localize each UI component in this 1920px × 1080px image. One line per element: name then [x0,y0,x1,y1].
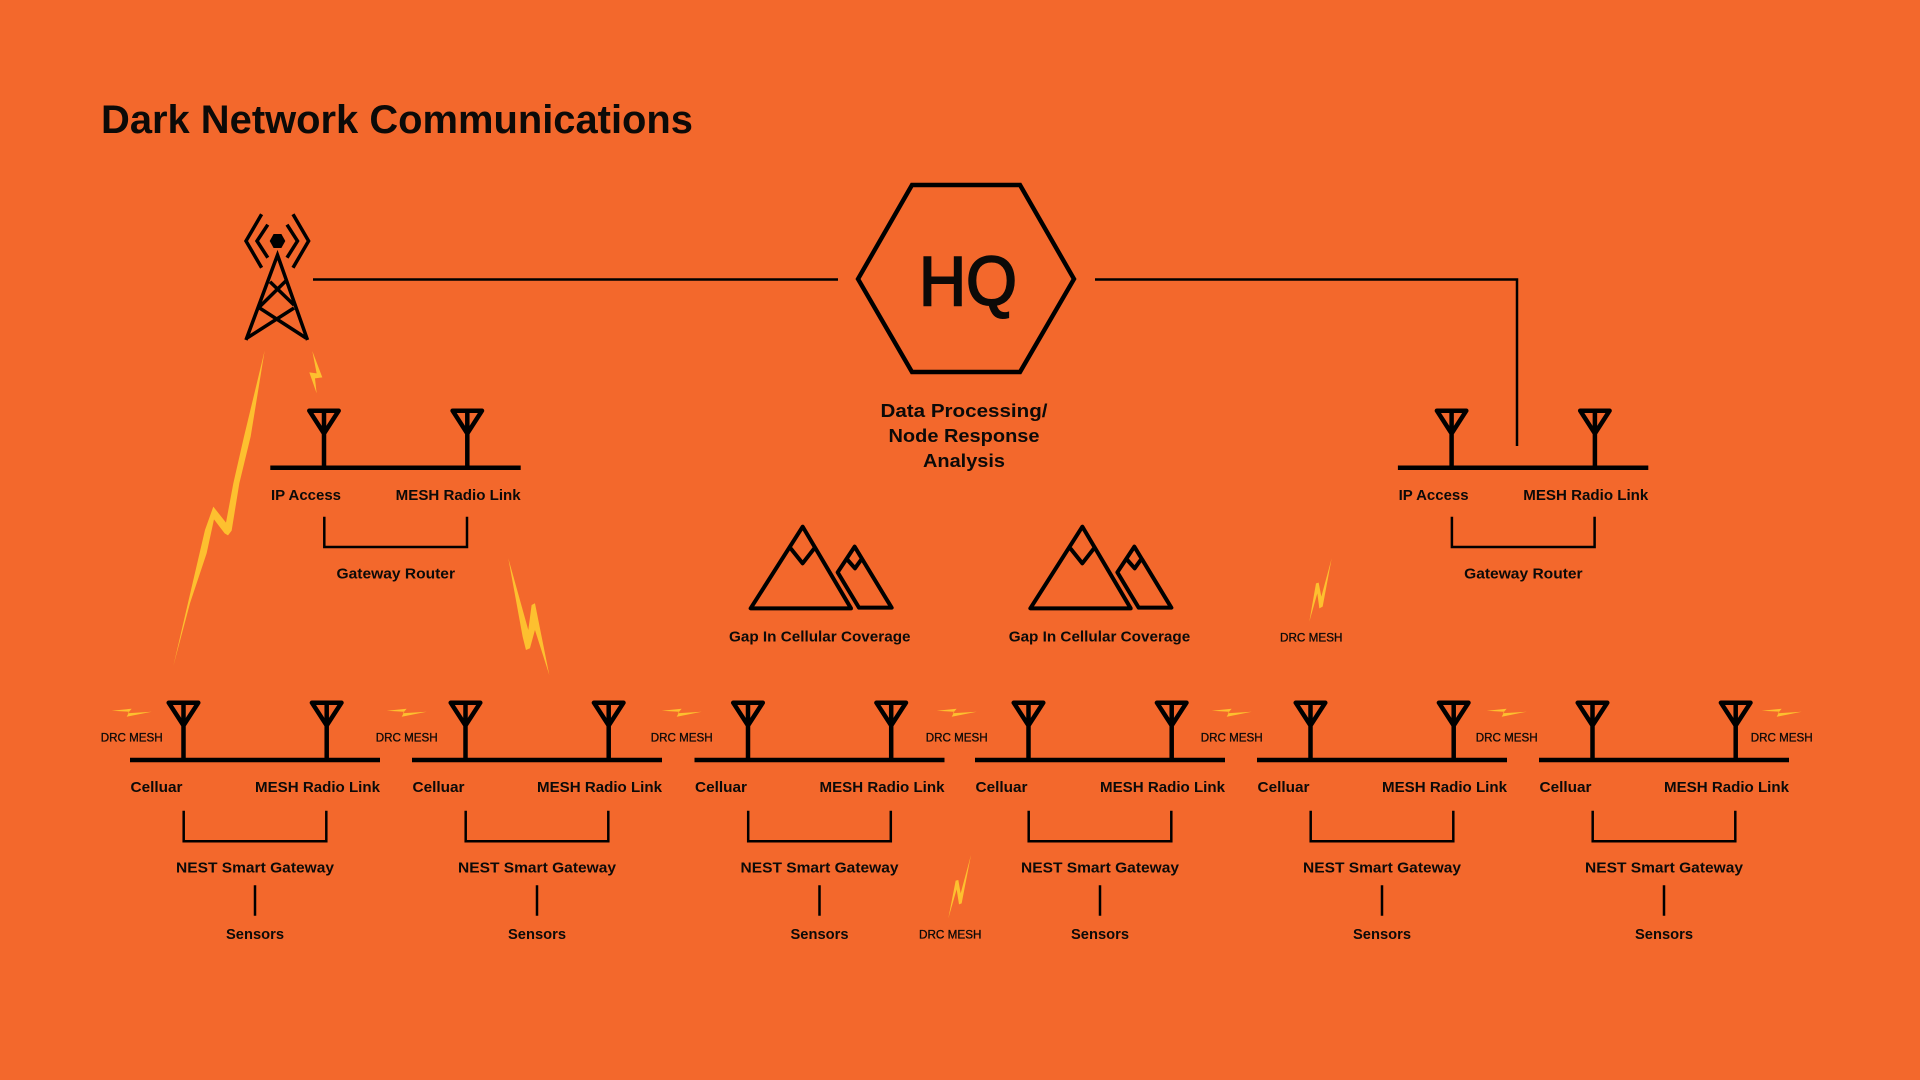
labels: Celluar [1540,779,1592,796]
icon: HQ hexagon [858,185,1074,372]
labels: MESH Radio Link [396,487,521,504]
panel: NEST node 4 [975,702,1226,943]
labels: IP Access [1399,487,1469,504]
labels: NEST Smart Gateway [740,859,899,876]
text: HQ description: Data Processing/ [880,400,1048,421]
labels: Celluar [412,779,465,796]
DRC mesh marker 1 [101,709,163,744]
DRC mesh marker 2: DRC MESH [376,730,438,744]
text: HQ description: Analysis [923,450,1005,471]
antennas and bar [1539,702,1789,760]
antennas and bar [1257,702,1507,760]
DRC mesh marker 7: DRC MESH [1751,730,1813,744]
lightning bolt: small tower [309,351,322,393]
DRC mesh marker 3 [651,709,713,744]
lightning bolt: lower mesh [919,855,982,942]
labels: NEST Smart Gateway [176,859,335,876]
icon: HQ hexagon: HQ [919,242,1017,320]
labels: Celluar [130,779,183,796]
panel: coverage gap 1 [729,527,910,646]
DRC mesh marker 1: DRC MESH [101,730,163,744]
labels [695,779,945,943]
labels: Celluar [1258,779,1310,796]
labels: MESH Radio Link [820,779,945,796]
labels [1399,487,1649,582]
label: DRC MESH [919,928,982,942]
title: Dark Network Communications [101,98,693,142]
connector: HQ to right gateway [1095,280,1517,446]
labels: Sensors [508,926,566,943]
labels: MESH Radio Link [1382,779,1508,796]
DRC mesh marker 7 [1751,709,1813,744]
labels: IP Access [271,487,341,504]
lightning bolt: gap mesh [1280,558,1342,645]
connectors [1029,811,1171,916]
lightning bolt: right of gateway [508,558,549,675]
labels [976,779,1226,943]
DRC mesh marker 6: DRC MESH [1476,730,1538,744]
icon: mountains [751,527,892,608]
labels [1258,779,1508,943]
bracket [1452,517,1595,547]
labels: NEST Smart Gateway [1585,859,1744,876]
label: Gap In Cellular Coverage [1009,629,1190,646]
antennas and bar [1398,410,1648,468]
labels: NEST Smart Gateway [1021,859,1180,876]
DRC mesh marker 6 [1476,709,1538,744]
labels [412,779,663,943]
panel: NEST node 6 [1539,702,1790,943]
connectors [466,811,608,916]
DRC mesh marker 4 [926,709,988,744]
panel: NEST node 5 [1257,702,1508,943]
connectors [748,811,891,916]
panel: left gateway router [270,410,521,582]
labels [271,487,521,582]
labels [1540,779,1790,943]
labels: Sensors [1353,926,1411,943]
antennas and bar [270,410,521,468]
label: Gap In Cellular Coverage [729,629,910,646]
DRC mesh marker 2 [376,709,438,744]
labels: Celluar [695,779,747,796]
DRC mesh marker 5 [1201,709,1263,744]
antennas and bar [975,702,1225,760]
DRC mesh marker 3: DRC MESH [651,730,713,744]
panel: NEST node 1 [130,702,381,943]
panel: NEST node 2 [412,702,663,943]
panel: NEST node 3 [694,702,945,943]
connector: tower to HQ [313,278,838,281]
icon: radio tower [246,214,309,340]
text: HQ description [880,400,1048,471]
labels: Gateway Router [1464,565,1583,582]
lightning bolt: large left [173,351,265,666]
connectors [1311,811,1453,916]
labels [130,779,381,943]
DRC mesh marker 4: DRC MESH [926,730,988,744]
labels: MESH Radio Link [1100,779,1226,796]
labels: MESH Radio Link [537,779,663,796]
connectors [1593,811,1735,916]
antennas and bar [694,702,944,760]
labels: MESH Radio Link [1523,487,1649,504]
labels: Sensors [1071,926,1129,943]
antennas and bar [412,702,662,760]
labels: NEST Smart Gateway [1303,859,1462,876]
labels: Gateway Router [336,565,455,582]
labels: Sensors [1635,926,1693,943]
labels: Sensors [790,926,848,943]
panel: right gateway router [1398,410,1649,582]
labels: Sensors [226,926,284,943]
label: DRC MESH [1280,631,1342,645]
bracket [324,517,467,547]
antennas and bar [130,702,380,760]
connectors [184,811,326,916]
labels: Celluar [976,779,1028,796]
labels: NEST Smart Gateway [458,859,617,876]
panel: coverage gap 2 [1009,527,1190,646]
labels: MESH Radio Link [255,779,381,796]
labels: MESH Radio Link [1664,779,1790,796]
icon: mountains [1030,527,1171,608]
text: HQ description: Node Response [888,425,1040,446]
DRC mesh marker 5: DRC MESH [1201,730,1263,744]
